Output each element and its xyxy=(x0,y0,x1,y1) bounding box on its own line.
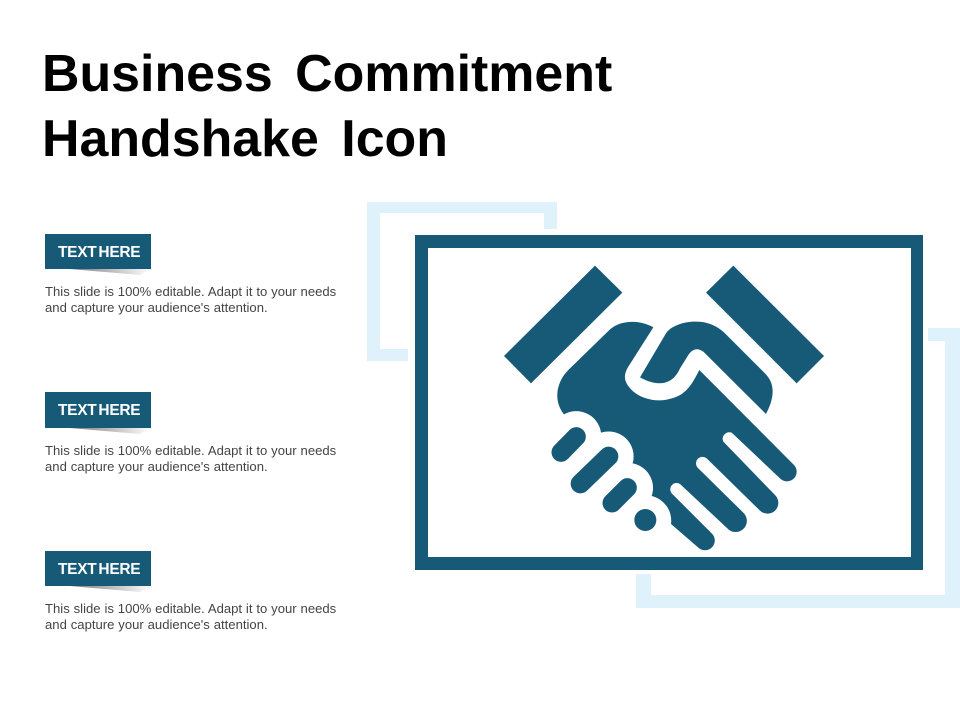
right cuff xyxy=(706,266,824,383)
description 2: and capture your audience's attention. xyxy=(45,459,268,474)
title xyxy=(42,44,612,167)
label button 2: TEXT HERE xyxy=(58,402,140,419)
label button 2 xyxy=(45,392,151,434)
main hand xyxy=(557,322,797,550)
text block 1 xyxy=(45,234,337,315)
description 3 xyxy=(45,601,337,632)
label button 3: TEXT HERE xyxy=(58,561,140,578)
icon: handshake xyxy=(504,266,824,550)
description 1 xyxy=(45,284,337,315)
text block 2 xyxy=(45,392,337,474)
label button 1 xyxy=(45,234,151,275)
description 1: and capture your audience's attention. xyxy=(45,300,268,315)
right hand xyxy=(640,322,773,414)
description 1: This slide is 100% editable. Adapt it to your needs xyxy=(45,284,337,299)
label button 1: TEXT HERE xyxy=(58,244,140,261)
label button 3 xyxy=(45,551,151,592)
description 3: and capture your audience's attention. xyxy=(45,617,268,632)
text block 3 xyxy=(45,551,337,632)
title: Business Commitment xyxy=(42,44,612,102)
light frame bracket: bottom right xyxy=(636,328,960,608)
light frame bracket: top left xyxy=(367,202,557,361)
description 2 xyxy=(45,443,337,474)
fingertip dot xyxy=(634,509,656,531)
description 3: This slide is 100% editable. Adapt it to your needs xyxy=(45,601,337,616)
small fingers xyxy=(561,437,627,503)
dark frame xyxy=(415,235,923,570)
description 2: This slide is 100% editable. Adapt it to your needs xyxy=(45,443,337,458)
left cuff xyxy=(504,266,622,383)
title: Handshake Icon xyxy=(42,109,448,167)
